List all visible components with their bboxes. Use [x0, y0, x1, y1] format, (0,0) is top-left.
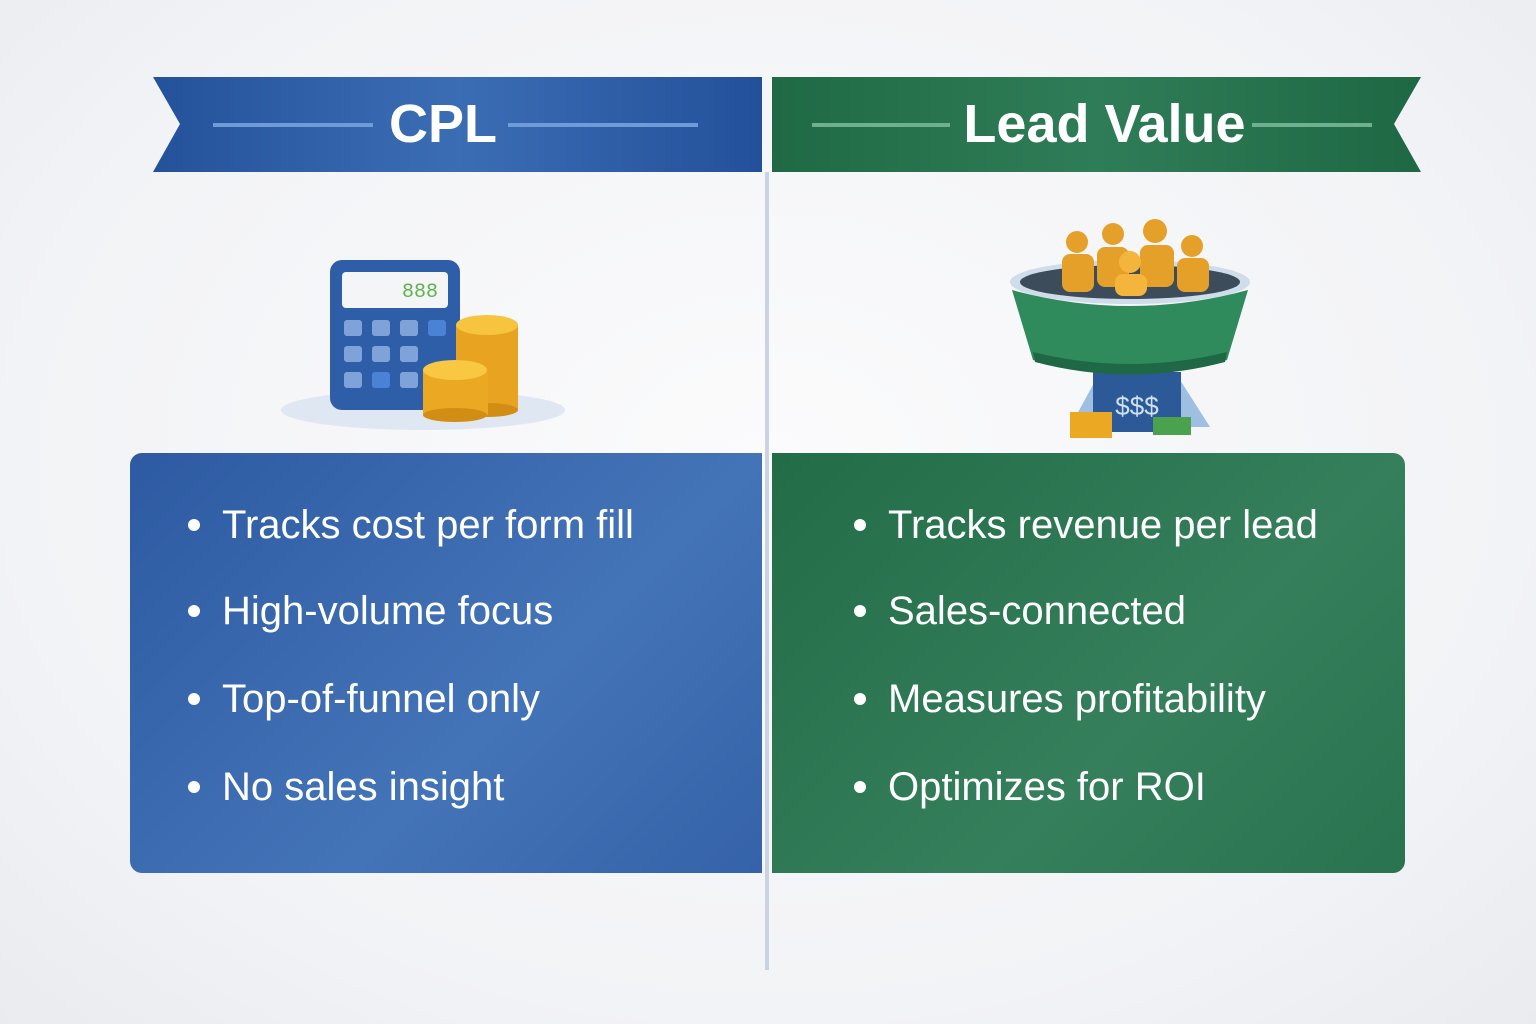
bullet: cost per form fill: Tracks cost per form fill	[222, 503, 634, 547]
heading: Lead Value: Lead Value	[963, 94, 1246, 154]
bullet: ROI: Optimizes for ROI	[888, 765, 1206, 809]
banner: CPL	[153, 77, 762, 172]
icon: calculator with coins: 888	[402, 281, 438, 304]
icon: funnel with people	[1010, 219, 1250, 438]
bullet: top-of-funnel: Top-of-funnel only	[222, 677, 540, 721]
heading: CPL: CPL	[389, 94, 497, 154]
divider	[765, 172, 769, 970]
bullet: revenue per lead: Tracks revenue per lead	[888, 503, 1318, 547]
bullet: no sales insight: No sales insight	[222, 765, 504, 809]
panel: Lead Value	[772, 453, 1405, 873]
panel: CPL	[130, 453, 762, 873]
bullet: high-volume: High-volume focus	[222, 589, 553, 633]
icon: calculator with coins	[281, 260, 565, 430]
banner: Lead Value	[772, 77, 1421, 172]
bullet: sales-connected: Sales-connected	[888, 589, 1186, 633]
icon: funnel with people: $$$	[1115, 391, 1159, 421]
bullet: profitability: Measures profitability	[888, 677, 1266, 721]
